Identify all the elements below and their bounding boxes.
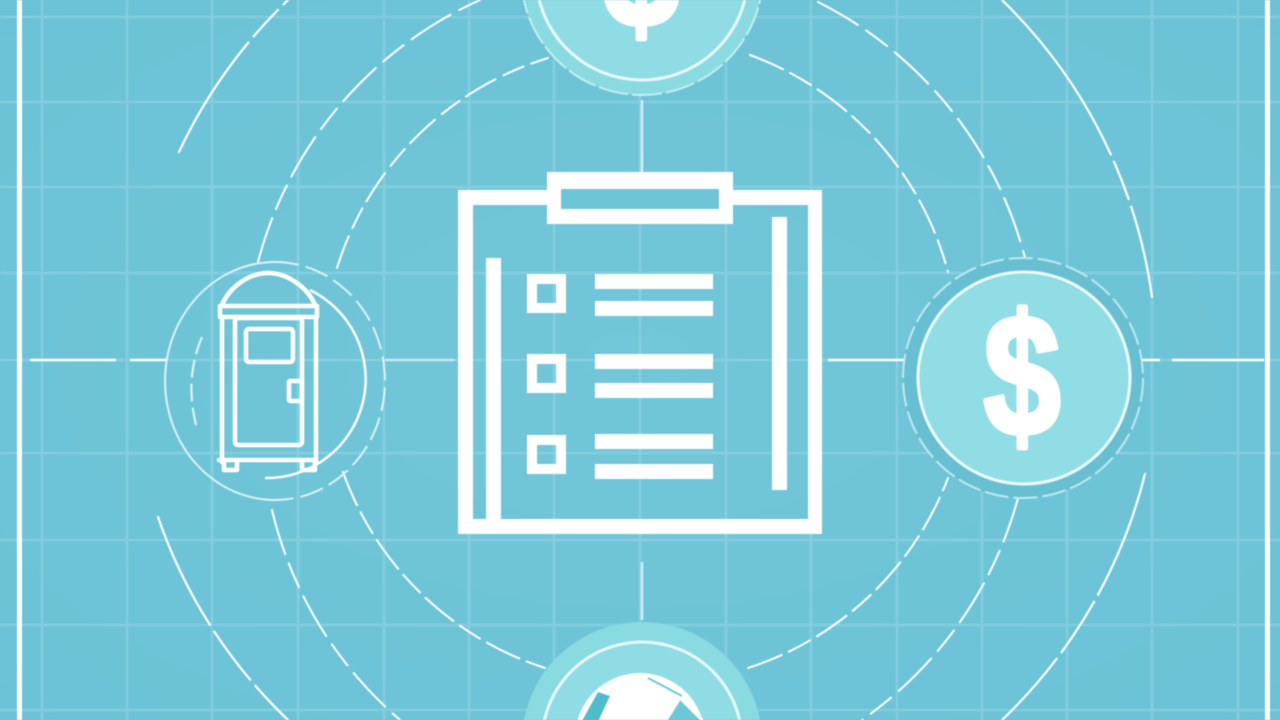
inner dashed orbit [337, 55, 948, 668]
outer dashed orbit [158, 0, 1152, 720]
checklist row 1 [527, 274, 713, 316]
clipboard outline [458, 190, 822, 534]
top dollar badge [521, 0, 763, 95]
icon: portable toilet [219, 273, 317, 470]
clipboard clip [547, 172, 733, 224]
middle dashed orbit [258, 0, 1027, 720]
right dollar badge [903, 258, 1143, 498]
bottom tools badge [522, 622, 762, 720]
orbit rings [158, 0, 1152, 720]
checklist row 3 [527, 434, 713, 479]
portable toilet badge [165, 262, 385, 500]
icon: wrench and screwdriver [575, 673, 705, 720]
margin bars [486, 258, 501, 520]
icon: dollar sign: $ [983, 280, 1061, 472]
clipboard icon [458, 172, 822, 534]
badge rings [165, 262, 385, 500]
checklist row 2 [527, 354, 713, 398]
axis lines [30, 100, 1264, 620]
